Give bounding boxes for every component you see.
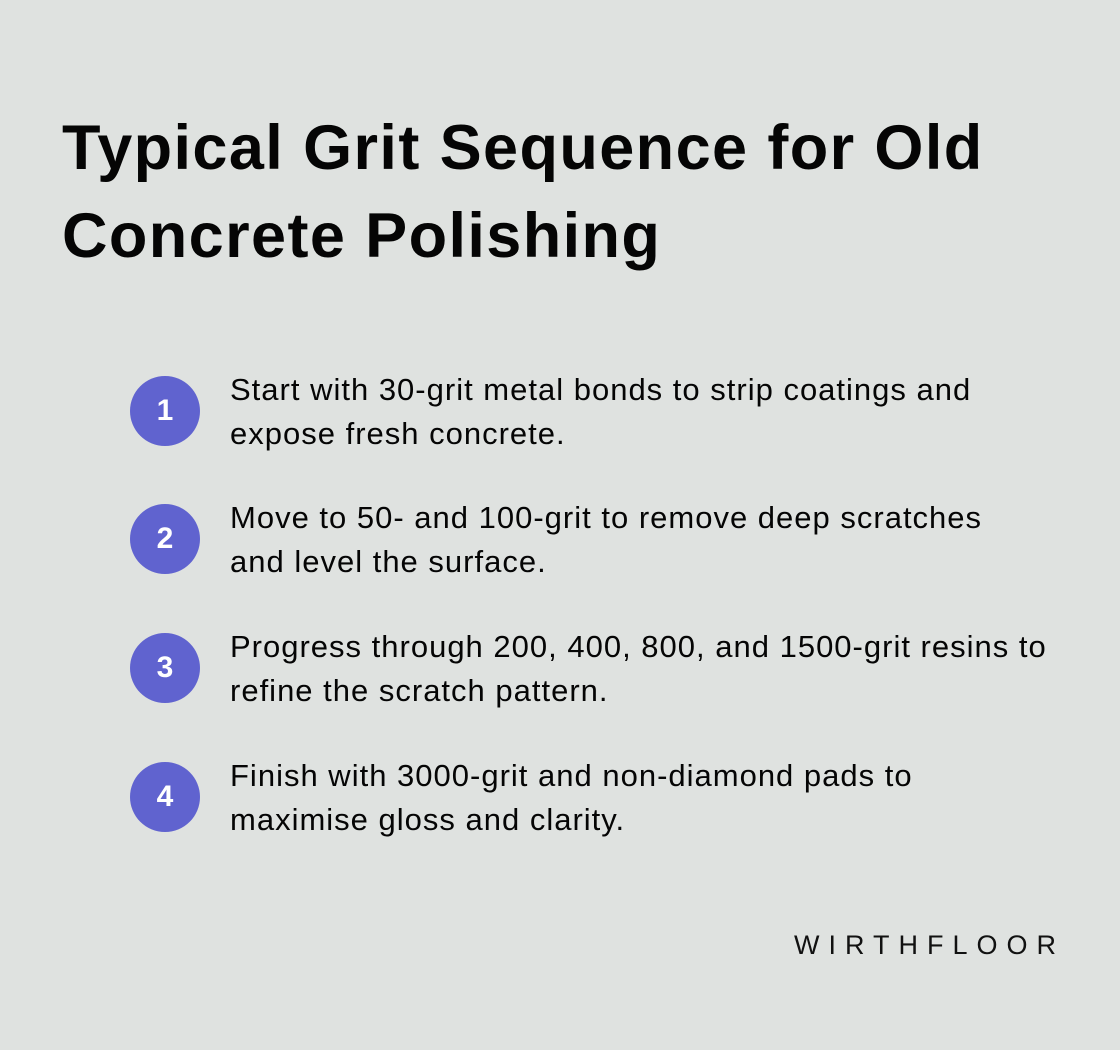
logo: WIRTHFLOOR — [794, 930, 1065, 960]
text: step 4 — [230, 758, 913, 837]
icon: number 3: 3 — [157, 651, 173, 684]
text: step 1: Start with 30-grit metal bonds to strip coatings and — [230, 372, 971, 407]
title: Concrete Polishing — [62, 201, 661, 271]
icon: number 1: 1 — [157, 394, 173, 427]
text: step 2: Move to 50- and 100-grit to remove deep scratches — [230, 500, 982, 535]
text: step 2 — [230, 500, 982, 579]
icon: number 2: 2 — [157, 522, 173, 555]
step 4 — [130, 758, 913, 837]
icon: number 2 — [130, 504, 200, 574]
title — [62, 113, 984, 271]
step 3 — [130, 629, 1047, 708]
icon: number 1 — [130, 376, 200, 446]
text: step 3: Progress through 200, 400, 800, and 1500-grit resins to — [230, 629, 1047, 664]
text: step 4: maximise gloss and clarity. — [230, 802, 625, 837]
text: step 1: expose fresh concrete. — [230, 416, 566, 451]
icon: number 4: 4 — [157, 780, 173, 813]
text: step 4: Finish with 3000-grit and non-diamond pads to — [230, 758, 913, 793]
text: step 2: and level the surface. — [230, 544, 547, 579]
step 1 — [130, 372, 971, 451]
text: step 3 — [230, 629, 1047, 708]
step 2 — [130, 500, 982, 579]
text: step 1 — [230, 372, 971, 451]
icon: number 3 — [130, 633, 200, 703]
text: step 3: refine the scratch pattern. — [230, 673, 609, 708]
title: Typical Grit Sequence for Old — [62, 113, 984, 183]
icon: number 4 — [130, 762, 200, 832]
